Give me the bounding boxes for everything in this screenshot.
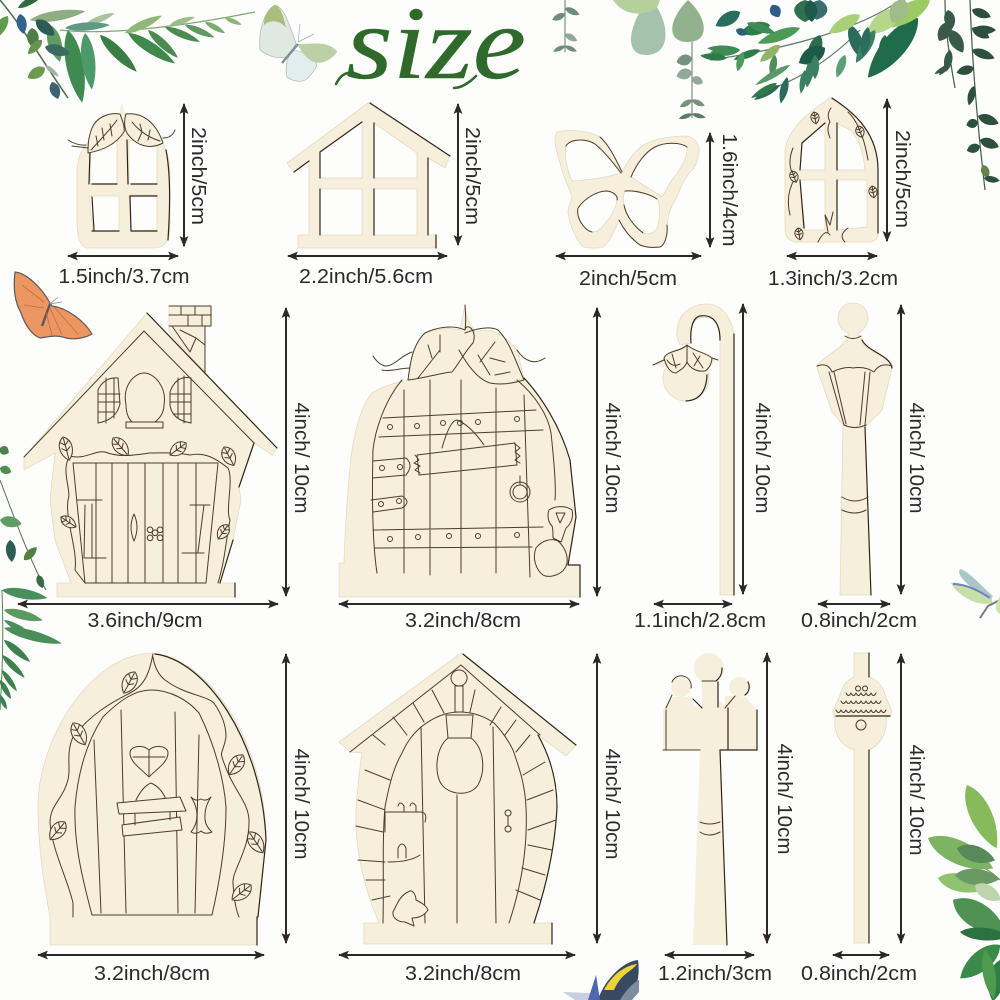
height labels: 4inch/ 10cm <box>751 403 773 513</box>
height labels: 4inch/ 10cm <box>601 749 623 859</box>
width labels: 3.6inch/9cm <box>88 610 202 632</box>
height labels <box>187 127 927 860</box>
height labels: 2inch/5cm <box>461 127 483 225</box>
panel: cottage door with chimney <box>24 306 277 597</box>
panel: tall arched window <box>785 98 878 242</box>
panel: lantern post stake <box>817 303 892 595</box>
foliage: far right hanging vines <box>933 0 1000 190</box>
butterfly: pale green top <box>260 5 337 81</box>
height labels: 4inch/ 10cm <box>905 745 927 855</box>
shovel <box>534 507 573 576</box>
foliage: left side fern <box>0 585 63 710</box>
width labels: 1.1inch/2.8cm <box>634 610 766 632</box>
panel: house window <box>287 103 450 248</box>
panel: triple lamp stake <box>663 653 757 945</box>
foliage: bottom right plant <box>923 780 1000 1000</box>
height labels: 4inch/ 10cm <box>290 749 312 859</box>
width labels: 1.5inch/3.7cm <box>58 266 190 288</box>
foliage: top right leaf cluster <box>700 0 934 104</box>
height labels: 2inch/5cm <box>187 127 209 225</box>
width labels: 3.2inch/8cm <box>405 963 521 985</box>
height labels: 2inch/5cm <box>891 130 913 228</box>
width labels: 0.8inch/2cm <box>801 963 917 985</box>
foliage: top centre hanging drops and vines <box>551 0 706 121</box>
panel: hook lamp stake <box>653 304 734 595</box>
width labels: 1.2inch/3cm <box>658 963 772 985</box>
width labels: 3.2inch/8cm <box>94 963 210 985</box>
height labels: 4inch/ 10cm <box>290 403 312 513</box>
dragonfly <box>951 569 1000 618</box>
panel: brick arch door with roof <box>339 653 576 944</box>
width labels: 0.8inch/2cm <box>801 610 917 632</box>
height labels: 4inch/ 10cm <box>601 403 623 513</box>
panel: leaf-topped wooden door <box>339 305 580 597</box>
width labels <box>58 266 917 985</box>
butterfly: blue and yellow bottom <box>563 960 639 1000</box>
dimension arrows <box>18 99 901 955</box>
panel: butterfly window <box>555 131 699 248</box>
foliage: left side vine <box>0 444 46 590</box>
height labels: 4inch/ 10cm <box>773 744 795 854</box>
upper window and shutters <box>98 373 191 428</box>
planked door <box>66 452 230 583</box>
butterfly: orange <box>14 272 92 339</box>
width labels: 3.2inch/8cm <box>405 610 521 632</box>
height labels: 1.6inch/4cm <box>718 134 740 246</box>
foliage: top-left fern and eucalyptus branch <box>0 0 255 104</box>
height labels: 4inch/ 10cm <box>905 403 927 513</box>
width labels: 1.3inch/3.2cm <box>768 268 898 290</box>
width labels: 2inch/5cm <box>579 268 677 290</box>
panel: bottom left arched door <box>38 653 269 945</box>
panel: small arched window <box>68 103 175 248</box>
width labels: 2.2inch/5.6cm <box>299 266 433 288</box>
vine leaves <box>57 434 239 542</box>
panel: acorn lamp stake <box>833 653 892 943</box>
